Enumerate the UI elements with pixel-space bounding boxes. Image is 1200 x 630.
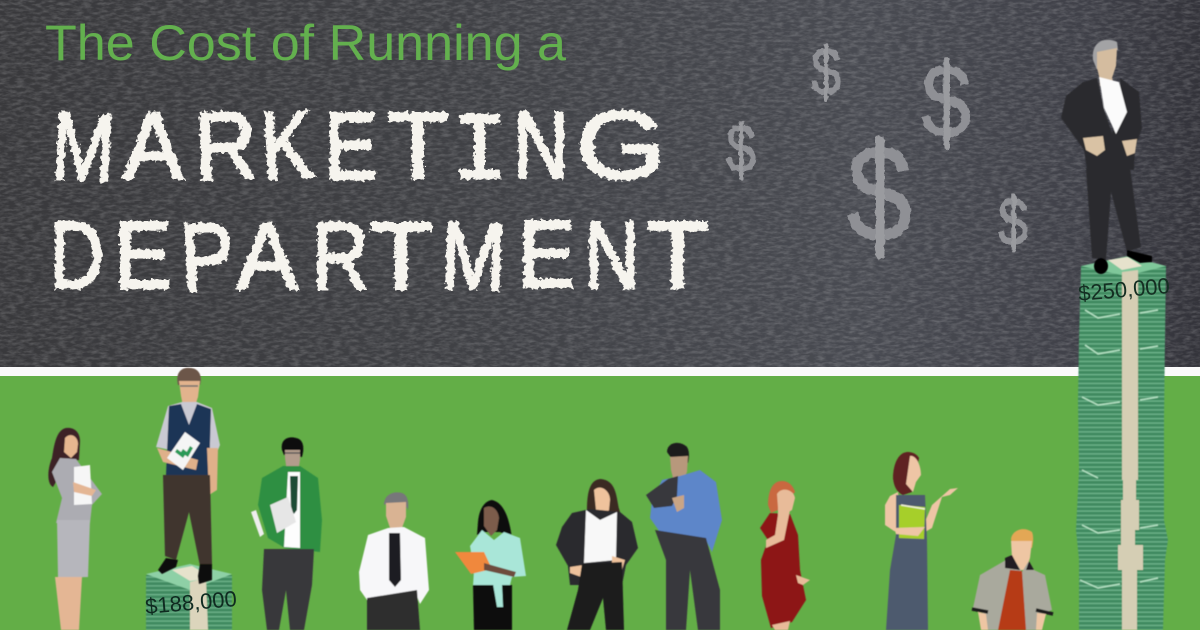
chalk dollar signs: $ (847, 117, 912, 271)
title: MARKETING chalk lettering (49, 91, 666, 207)
title: MARKETING chalk lettering: N (513, 92, 569, 199)
person: man in navy vest on the stack (156, 368, 220, 584)
person: blond man in grey jacket (972, 529, 1053, 630)
tall money stack (1076, 256, 1168, 630)
title: MARKETING chalk lettering: K (258, 91, 316, 200)
title: DEPARTMENT chalk lettering: E (518, 201, 575, 308)
title: DEPARTMENT chalk lettering: E (114, 202, 172, 309)
title: DEPARTMENT chalk lettering: T (369, 203, 433, 310)
person: woman in grey suit (48, 428, 102, 630)
person: woman in black blazer (556, 479, 638, 630)
chalk dollar signs: $ (811, 34, 841, 110)
person: man in blue shirt with jacket (646, 443, 722, 630)
label: $250,000: $250,000 (1077, 273, 1171, 306)
chalk dollar signs: $ (726, 111, 756, 187)
title: MARKETING chalk lettering: R (193, 92, 259, 201)
chalk dollar signs: $ (921, 44, 971, 160)
title: DEPARTMENT chalk lettering: T (646, 202, 709, 309)
person: man in green jacket (251, 437, 322, 630)
chalkboard background (0, 0, 1200, 368)
title: DEPARTMENT chalk lettering: P (177, 203, 237, 312)
title: DEPARTMENT chalk lettering: A (237, 203, 297, 310)
title: DEPARTMENT chalk lettering: M (439, 202, 508, 311)
chalk dollar signs (726, 34, 1028, 271)
small money stack (146, 564, 232, 630)
person: woman with lime book (885, 452, 958, 630)
title: DEPARTMENT chalk lettering: R (312, 203, 369, 310)
title: MARKETING chalk lettering: I (451, 98, 509, 207)
title: MARKETING chalk lettering: T (387, 93, 449, 200)
person: man with black tie (359, 492, 429, 630)
title: MARKETING chalk lettering: E (324, 93, 378, 200)
person: executive on top of the stack (1061, 40, 1152, 274)
white chalk ledge (0, 367, 1200, 376)
title: DEPARTMENT chalk lettering: N (584, 202, 640, 309)
title: MARKETING chalk lettering: G (576, 92, 666, 199)
chalk dollar signs: vertical strokes (741, 46, 1014, 255)
person: woman in red dress on phone (760, 481, 810, 630)
label: $188,000: $188,000 (144, 586, 238, 619)
title: MARKETING chalk lettering: M (49, 92, 118, 203)
title: DEPARTMENT chalk lettering: D (50, 202, 104, 309)
title: The Cost of Running a: The Cost of Running a (45, 15, 566, 71)
green floor panel (0, 376, 1200, 630)
chalk dollar signs: $ (998, 184, 1028, 260)
person: woman with orange folder (455, 500, 526, 630)
title: MARKETING chalk lettering: A (123, 93, 183, 200)
title: DEPARTMENT chalk lettering (50, 201, 709, 312)
